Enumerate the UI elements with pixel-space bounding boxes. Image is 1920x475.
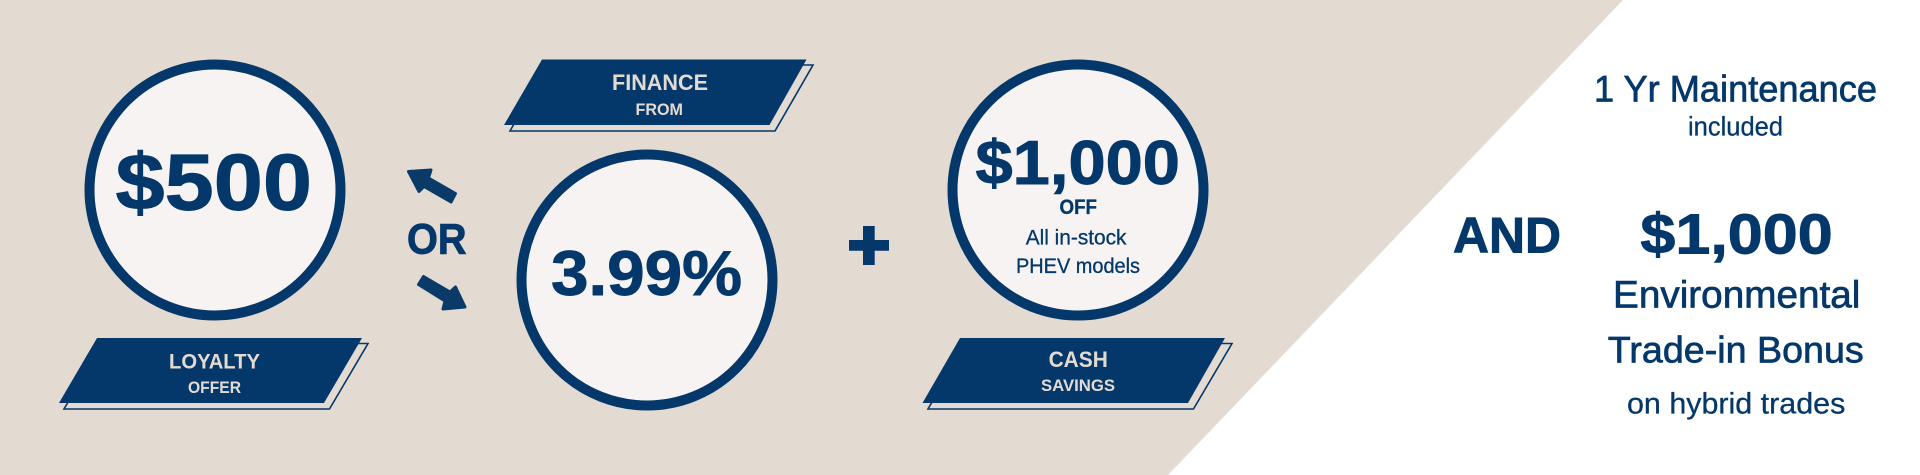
circle: $1,000 off bbox=[952, 64, 1204, 316]
banner: finance from: FINANCE bbox=[612, 70, 708, 95]
amount: $1,000: $1,000 bbox=[1640, 202, 1833, 266]
banner: cash savings: SAVINGS bbox=[1041, 376, 1115, 395]
label: OR: OR bbox=[407, 216, 466, 264]
circle: $500: $500 bbox=[116, 138, 312, 226]
circle: $1,000 off: OFF bbox=[1060, 196, 1097, 219]
connector: OR with arrows bbox=[407, 170, 466, 309]
banner: finance from: FROM bbox=[636, 100, 683, 119]
text: environmental: Environmental bbox=[1613, 275, 1860, 317]
panel: extras bbox=[1453, 68, 1877, 420]
banner: loyalty offer: OFFER bbox=[188, 378, 241, 397]
circle: $500 bbox=[90, 64, 340, 316]
banner: cash savings: CASH bbox=[1049, 347, 1108, 372]
circle: $1,000 off: $1,000 bbox=[976, 129, 1180, 198]
banner: cash savings bbox=[922, 338, 1232, 409]
text: on hybrid trades: on hybrid trades bbox=[1627, 387, 1845, 420]
banner: finance from bbox=[504, 60, 813, 131]
arrow: down-right bbox=[418, 276, 465, 309]
circle: 3.99% bbox=[522, 154, 772, 406]
circle: 3.99%: 3.99% bbox=[551, 239, 742, 309]
icon: plus bbox=[849, 226, 889, 265]
text: included: included bbox=[1688, 112, 1783, 142]
banner: loyalty offer bbox=[59, 338, 368, 409]
panel: cash savings bbox=[922, 64, 1232, 409]
label: AND: AND bbox=[1453, 207, 1561, 263]
arrow: up-left bbox=[408, 170, 456, 202]
circle: $1,000 off: All in-stock bbox=[1026, 226, 1127, 249]
text: trade-in bonus: Trade-in Bonus bbox=[1608, 330, 1864, 371]
heading: 1 yr maintenance: 1 Yr Maintenance bbox=[1594, 68, 1877, 110]
panel: finance bbox=[504, 60, 813, 406]
panel: loyalty offer bbox=[59, 64, 368, 409]
banner: loyalty offer: LOYALTY bbox=[169, 350, 260, 374]
circle: $1,000 off: PHEV models bbox=[1016, 255, 1140, 278]
